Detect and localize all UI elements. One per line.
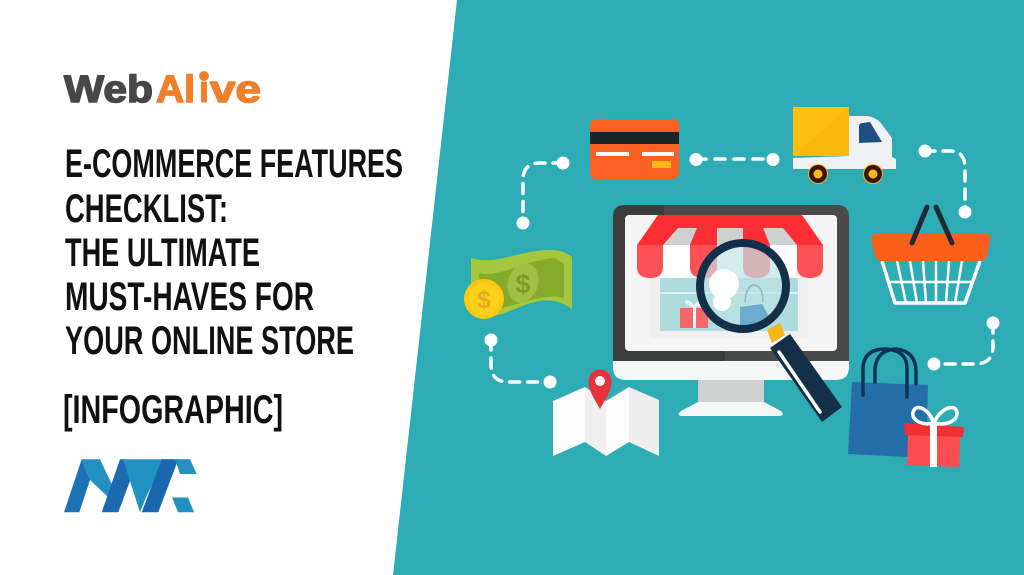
icon: folded map with pin [553,370,659,456]
icon: red gift box [904,408,964,467]
connector: dashed path bag to basket [928,316,1000,370]
title [65,142,403,363]
title: E-COMMERCE FEATURES [65,142,403,186]
panel: teal background [393,0,1024,575]
logo: WebAlive: Al [156,69,195,111]
icon: magnifying glass [700,243,842,422]
connector: dashed path truck to basket [918,144,972,218]
icon: shopping basket [871,207,990,303]
logo: WebAlive [64,69,261,111]
logo: WebAlive: i [199,69,209,111]
awning [637,215,823,278]
title: CHECKLIST: [65,187,228,231]
logo: MT monogram [64,459,197,512]
title: MUST-HAVES FOR [65,275,314,319]
icon: credit card [590,119,679,179]
view through the lens [709,269,770,328]
connector: dashed path card to truck [690,153,780,166]
icon: cash and coin [464,250,572,319]
connector: dashed path card to money [516,156,570,230]
gift in shop window [680,301,708,328]
icon: delivery truck [793,107,896,184]
icon: shopping bag [848,349,928,458]
title: YOUR ONLINE STORE [65,319,354,363]
subtitle: infographic tag: [INFOGRAPHIC] [63,388,283,432]
logo: WebAlive: ve [210,69,261,111]
icon: desktop monitor storefront [613,205,849,416]
title: THE ULTIMATE [65,231,260,275]
icon: cash and coin: $ [515,269,531,299]
connector: dashed path money to map [484,334,556,388]
icon: cash and coin: $ [477,286,491,314]
logo: WebAlive: Web [64,69,153,111]
